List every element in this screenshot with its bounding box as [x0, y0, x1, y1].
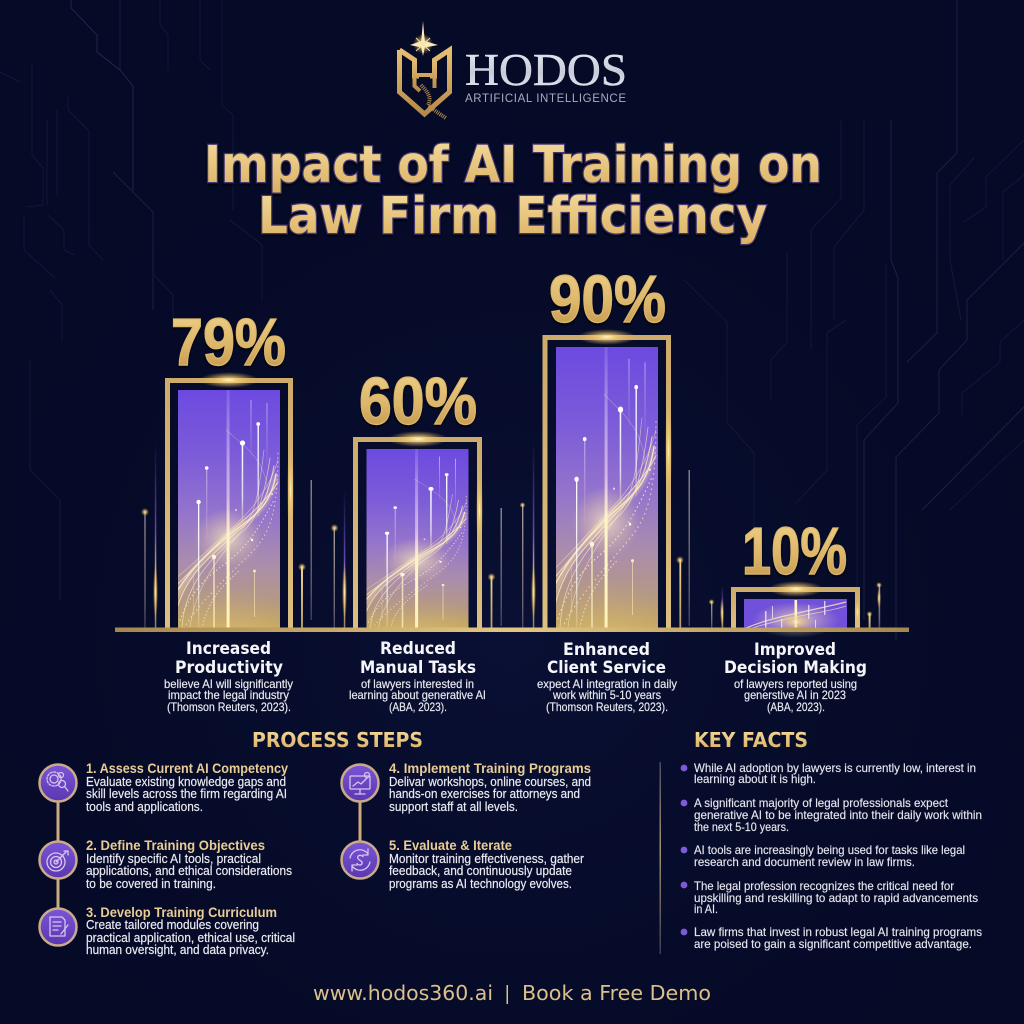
step text: Delivar workshops, online courses, and	[389, 775, 591, 789]
step text: applications, and ethical considerations	[86, 864, 292, 878]
fact 2: the next 5-10 years.	[694, 820, 789, 834]
step 4	[342, 761, 591, 814]
label: improved decision making	[724, 640, 867, 714]
label: enhanced client service: work within 5-10 years	[552, 689, 661, 702]
icon: star	[410, 21, 438, 56]
bar labels	[164, 639, 867, 714]
fact 4: in AI.	[694, 902, 718, 916]
label: improved decision making: of lawyers reported using	[734, 678, 857, 691]
fact 5	[681, 925, 982, 951]
label: improved decision making: Decision Making	[724, 658, 867, 678]
bar: enhanced client service 90%	[544, 262, 672, 711]
value: 10%	[742, 514, 847, 589]
title	[204, 136, 822, 246]
label: increased productivity: Increased	[186, 639, 271, 659]
label: reduced manual tasks: Manual Tasks	[360, 658, 476, 678]
title: Impact of AI Training on	[204, 136, 822, 195]
fact 1	[681, 761, 976, 786]
bar: improved decision making 10%	[734, 514, 860, 638]
step text: 4. Implement Training Programs	[389, 761, 591, 776]
icon: monitor with chart	[342, 764, 378, 802]
label: increased productivity: believe AI will significantly	[164, 678, 293, 691]
step text: human oversight, and data privacy.	[86, 943, 269, 957]
label: reduced manual tasks: learning about generative AI	[349, 689, 486, 702]
logo	[400, 21, 627, 118]
footer call to action: Book a Free Demo	[522, 981, 711, 1005]
step text: Monitor training effectiveness, gather	[389, 852, 584, 866]
step 1	[40, 761, 288, 814]
step text: Create tailored modules covering	[86, 918, 259, 932]
label: improved decision making: (ABA, 2023).	[767, 701, 825, 714]
step text: hands-on exercises for attorneys and	[389, 787, 580, 801]
fact 4: upskilling and reskilling to adapt to rapid advancements	[694, 891, 978, 905]
step 2	[40, 838, 292, 891]
step text: 3. Develop Training Curriculum	[86, 905, 277, 920]
fact 5: Law firms that invest in robust legal AI training programs	[694, 925, 982, 939]
fact 3: research and document review in law firms.	[694, 855, 915, 869]
step text: 5. Evaluate & Iterate	[389, 838, 512, 853]
panel: key facts	[660, 728, 982, 954]
step text: skill levels across the firm regarding AI	[86, 787, 287, 801]
step text: 1. Assess Current AI Competency	[86, 761, 288, 776]
value: 90%	[549, 262, 666, 337]
bar: reduced manual tasks 60%	[354, 364, 483, 681]
connectors	[56, 800, 362, 910]
fact 2	[681, 796, 982, 834]
fact 5: are poised to gain a significant competitive advantage.	[694, 937, 972, 951]
icon: iterate arrows	[342, 842, 378, 878]
label: enhanced client service: (Thomson Reuters, 2023).	[546, 701, 668, 714]
value: 60%	[359, 364, 477, 439]
footer call to action: www.hodos360.ai	[313, 981, 493, 1005]
fact 2: A significant majority of legal professionals expect	[694, 796, 949, 810]
step text	[86, 838, 292, 891]
icon: target	[40, 842, 76, 878]
label: reduced manual tasks: Reduced	[380, 639, 456, 659]
heading: key facts: KEY FACTS	[694, 728, 808, 752]
title: Law Firm Efficiency	[258, 187, 767, 246]
panel: process steps	[40, 728, 591, 957]
value: 79%	[171, 305, 286, 380]
step text: practical application, ethical use, critical	[86, 931, 295, 945]
label: increased productivity: impact the legal industry	[168, 689, 289, 702]
fact 3	[681, 843, 965, 869]
tagline: ARTIFICIAL INTELLIGENCE	[465, 93, 626, 105]
step text	[389, 761, 591, 814]
step text: feedback, and continuously update	[389, 864, 572, 878]
label: enhanced client service	[537, 640, 677, 714]
step text: to be covered in training.	[86, 877, 216, 891]
label: enhanced client service: Client Service	[547, 658, 666, 678]
label: increased productivity: (Thomson Reuters, 2023).	[167, 701, 291, 714]
fact 1: learning about it is high.	[694, 772, 816, 786]
footer call to action	[313, 981, 711, 1005]
step text	[389, 838, 584, 891]
step text: Identify specific AI tools, practical	[86, 852, 261, 866]
step text	[86, 761, 288, 814]
step text: 2. Define Training Objectives	[86, 838, 265, 853]
label: reduced manual tasks: of lawyers interested in	[361, 678, 474, 691]
step text: support staff at all levels.	[389, 800, 518, 814]
heading: process steps: PROCESS STEPS	[252, 728, 423, 752]
bar chart	[115, 262, 909, 711]
fact 2: generative AI to be integrated into their daily work within	[694, 808, 982, 822]
label: improved decision making: Improved	[754, 640, 836, 660]
label: reduced manual tasks: (ABA, 2023).	[389, 701, 447, 714]
step 5	[342, 838, 584, 891]
fact 4	[681, 879, 978, 916]
label: improved decision making: generstive AI in 2023	[744, 689, 846, 702]
fact 4: The legal profession recognizes the critical need for	[694, 879, 954, 893]
step text: Evaluate existing knowledge gaps and	[86, 775, 286, 789]
label: enhanced client service: Enhanced	[563, 640, 650, 660]
baseline	[115, 628, 909, 632]
label: increased productivity	[164, 639, 293, 714]
step text	[86, 905, 295, 957]
label: increased productivity: Productivity	[175, 658, 283, 678]
icon: shield emblem	[400, 21, 450, 118]
step 3	[40, 905, 295, 957]
fact 3: AI tools are increasingly being used for tasks like legal	[694, 843, 965, 857]
icon: gears and magnifier	[40, 764, 76, 802]
fact 1: While AI adoption by lawyers is currently low, interest in	[694, 761, 976, 775]
step text: programs as AI technology evolves.	[389, 877, 572, 891]
bar: increased productivity 79%	[166, 305, 294, 698]
brand name: HODOS	[465, 45, 627, 95]
decorative light rays	[141, 440, 882, 628]
label: reduced manual tasks	[349, 639, 486, 714]
icon: document	[40, 908, 76, 946]
label: enhanced client service: expect AI integration in daily	[537, 678, 677, 691]
step text: tools and applications.	[86, 800, 203, 814]
